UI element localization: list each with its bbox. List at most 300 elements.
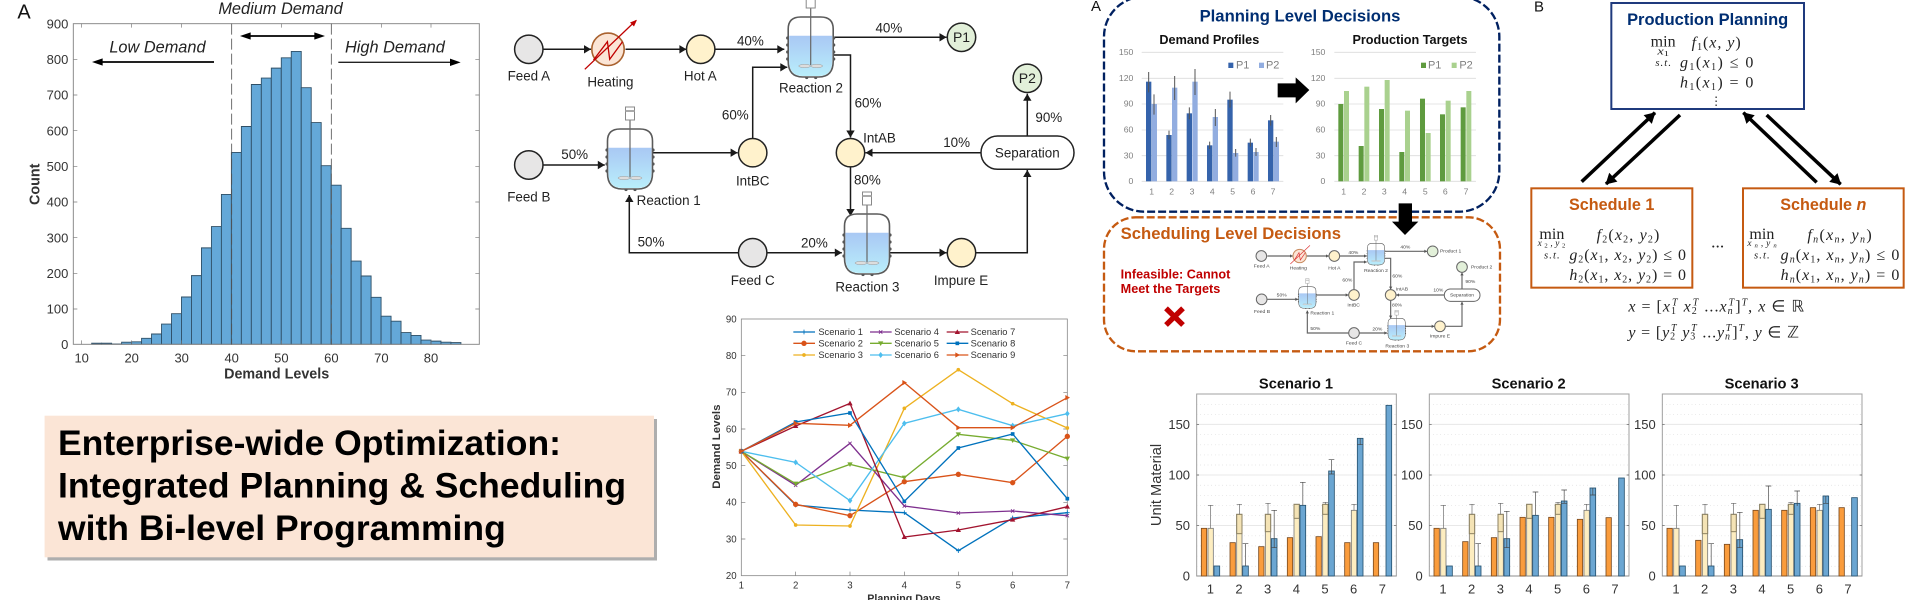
histogram axes: 40 [224,350,239,365]
chart axes: 6 [1010,580,1015,591]
chart axes [711,314,1070,600]
production planning box: x [1702,55,1710,72]
schedule n box: , [1841,267,1850,284]
variable definitions: T [1671,323,1678,334]
variable definitions: ... [1699,299,1718,316]
schedule 1 box: 2 [1646,254,1651,265]
infeasible note [1121,267,1231,296]
production planning box: f [1692,35,1699,52]
arrow: schedule n to planning [1743,113,1817,182]
chart axes: 2 [793,580,798,591]
schedule 1 box: min [1539,226,1564,243]
schedule 1 box: x [1613,247,1621,264]
process labels: Reaction 3 [835,280,899,295]
production planning box: x [1702,75,1710,92]
variable definitions: T [1742,297,1749,308]
histogram axes: Demand Levels [224,366,329,382]
demand range markers: Medium Demand [218,0,344,18]
production planning box: 1 [1697,42,1702,53]
chart: demand profiles: P2 [1266,59,1279,71]
variable definitions: T [1726,323,1733,334]
arrow: planning to schedule n [1767,115,1841,184]
production planning box: ( [1703,35,1708,52]
mini process diagram: 60% [1342,278,1353,284]
histogram axes: 30 [174,350,189,365]
schedule n box: , [1841,227,1850,244]
schedule n box: x [1825,247,1834,264]
demand range markers: High Demand [345,38,446,56]
schedule n box: n [1813,234,1818,245]
schedule n box: n [1835,274,1840,285]
schedule n box: n [1860,234,1865,245]
schedule 1 box: h [1569,267,1577,284]
bar chart: scenario 1 [1168,376,1396,596]
schedule n box: , [1816,267,1825,284]
schedule n box: n [1835,254,1840,265]
schedule 1 box: ( [1584,247,1590,264]
chart: demand profiles: 90 [1124,99,1134,109]
chart: demand profiles: 7 [1271,187,1276,197]
chart: production targets: 2 [1362,187,1367,197]
schedule n box: Schedule n [1780,196,1867,214]
chart: demand profiles: 0 [1129,176,1134,186]
schedule 1 box: g [1569,247,1577,264]
variable definitions: y ∈ ℤ [1755,324,1799,341]
chart axes: Demand Levels [711,405,723,489]
chart: demand profiles: 120 [1119,73,1134,83]
production planning box: 1 [1711,82,1716,93]
process labels: Impure E [934,273,988,288]
schedule n box: x [1825,267,1833,284]
chart: demand profiles: 150 [1119,47,1134,57]
process labels: 20% [801,236,828,251]
mini process diagram: 20% [1372,327,1383,333]
production planning box: Production Planning [1627,11,1788,29]
histogram axes: 400 [47,195,68,210]
mini process diagram: IntAB [1396,287,1409,293]
histogram axes [27,17,479,382]
mini process diagram: Separation [1450,293,1474,299]
histogram axes: 600 [47,123,68,138]
schedule 1 box: , [1604,267,1613,284]
chart axes: 70 [726,388,737,399]
process labels: IntAB [863,130,896,145]
variable definitions: 2 [1692,306,1697,317]
schedule 1 box: x [1589,267,1598,284]
chart: demand profiles: Demand Profiles [1159,33,1259,47]
process labels: 50% [638,235,664,250]
schedule 1 box: y [1638,227,1648,244]
mini process diagram: Heating [1290,266,1307,272]
schedule 1 box: 2 [1578,274,1583,285]
line chart legend: Scenario 9 [971,350,1015,360]
line chart legend: Scenario 5 [894,338,939,348]
chart: demand profiles: 4 [1210,187,1215,197]
bar chart: scenario 3 [1634,376,1862,596]
histogram axes: 0 [61,337,68,352]
title box: with Bi-level Programming [57,508,506,548]
histogram bars [92,51,461,344]
reactors [605,0,892,276]
scenario lines [741,370,1067,551]
chart: production targets: 7 [1464,187,1469,197]
panel: demand histogram [17,0,479,382]
chart: demand profiles: 60 [1124,125,1134,135]
schedule 1 box: 2 [1622,274,1627,285]
production planning box: x [1657,46,1662,57]
infeasible note: Infeasible: Cannot [1121,267,1231,281]
arrow: planning to targets [1278,77,1309,103]
schedule 1 box: y [1636,247,1646,264]
variable definitions: x [1718,299,1727,316]
schedule 1 box: 2 [1648,234,1653,245]
production planning box: ⋮ [1710,95,1722,107]
flow arrows [543,37,1027,253]
chart: production targets: 120 [1311,73,1326,83]
production planning box: ) = 0 [1717,75,1753,92]
mini process diagram: Reaction 1 [1310,310,1334,316]
planning dashed frame [1104,0,1499,212]
schedule n box: min [1749,226,1774,243]
chart axes: 30 [726,534,737,545]
schedule n box: ) = 0 [1865,267,1899,284]
schedule 1 box: ) ≤ 0 [1652,247,1686,264]
schedule n box: n [1773,242,1777,249]
mini process diagram: Reaction 3 [1385,344,1409,350]
schedule 1 box: x [1613,267,1621,284]
chart: production targets: 30 [1316,150,1326,160]
production planning box: ( [1696,75,1701,92]
schedule n box: g [1781,247,1789,264]
schedule n box: n [1754,242,1758,249]
chart axes: 40 [726,498,737,509]
chart: production targets: 0 [1321,176,1326,186]
schedule 1 box: 2 [1544,242,1548,249]
bar chart: scenario 1: Scenario 1 [1259,376,1333,392]
schedule 1 box: f [1597,227,1604,244]
icon: red cross [1166,308,1183,325]
panel B: bi-level formulation [1531,0,1904,343]
schedule n box: , [1841,247,1850,264]
panel letter A: A [17,1,31,23]
bar chart: scenario 2: Scenario 2 [1492,376,1566,392]
ellipsis between schedules: ... [1711,232,1724,251]
process labels: 60% [855,95,881,110]
mini process diagram: 40% [1400,245,1411,251]
mini process diagram: Impure E [1430,334,1451,340]
mini process diagram: Product 1 [1440,249,1462,255]
process labels: 40% [875,20,902,35]
schedule n box: y [1849,247,1859,264]
demand range markers: Low Demand [109,38,206,56]
schedule n box: ) [1866,227,1872,244]
chart: demand profiles: 30 [1124,150,1134,160]
arrow: schedule 1 to planning [1582,113,1655,182]
process labels: 80% [854,172,881,187]
histogram axes: 200 [47,266,68,281]
schedule n box: ( [1819,227,1825,244]
mini process diagram: 60% [1392,273,1403,279]
schedule 1 box: 2 [1622,254,1627,265]
mini process diagram: Hot A [1328,266,1341,272]
chart: demand profiles: 1 [1149,187,1154,197]
chart: production targets: 6 [1443,187,1448,197]
schedule n box: n [1790,254,1795,265]
chart: production targets: 90 [1316,99,1326,109]
variable definitions: ... [1698,324,1716,341]
histogram axes: 60 [324,350,339,365]
process labels: Feed C [731,273,775,288]
line chart legend: Scenario 7 [971,327,1015,337]
chart axes: 60 [726,424,737,435]
process labels: P1 [953,29,970,45]
mini process diagram: 90% [1465,279,1476,285]
schedule n box: y [1849,267,1859,284]
schedule 1 box: x [1614,227,1622,244]
mini process diagram: Feed B [1254,309,1271,315]
variable definitions: n [1725,332,1730,343]
process labels: Hot A [684,69,717,84]
panel: scheduling level decisions [1104,203,1500,351]
variable definitions: T [1738,323,1745,334]
schedule 1 box: , [1629,227,1638,244]
mini process diagram: Feed A [1254,263,1270,269]
schedule n box: x [1801,247,1809,264]
chart: production targets: 3 [1382,187,1387,197]
line chart legend: Scenario 8 [971,338,1015,348]
production planning box: 1 [1711,62,1716,73]
schedule n box: ( [1796,267,1801,284]
scheduling dashed frame [1104,217,1500,351]
process labels: 90% [1035,110,1062,125]
mini process diagram: 80% [1392,302,1403,308]
schedule 1 box: 2 [1646,274,1651,285]
mini process diagram: Feed C [1346,341,1363,347]
production planning box: 1 [1689,62,1694,73]
schedule 1 box: 1 [1599,254,1604,265]
line chart legend [793,327,1015,360]
schedule 1 box: , [1628,267,1637,284]
line chart legend: Scenario 2 [818,338,863,348]
chart: production targets [1311,33,1476,197]
process labels: 60% [722,107,749,122]
variable definitions: , [1745,324,1754,341]
variable definitions: T [1693,297,1700,308]
schedule n box: n [1790,274,1795,285]
process flow diagram [507,0,1074,295]
variable definitions: 3 [1690,332,1695,343]
process labels: Separation [995,146,1060,161]
schedule n box: 1 [1810,274,1815,285]
schedule n box: h [1781,267,1789,284]
schedule 1 box: 1 [1598,274,1603,285]
variable definitions: x = [x [1628,299,1670,316]
schedule n box: x [1825,227,1833,244]
schedule 1 box: 2 [1623,234,1628,245]
schedule n box: ( [1796,247,1801,264]
chart axes: 50 [726,461,737,472]
title box: Enterprise-wide Optimization: [58,423,561,463]
chart: demand profiles: P1 [1236,59,1249,71]
production planning box: 1 [1664,49,1669,58]
variable definitions: T [1672,297,1679,308]
line chart legend: Scenario 4 [894,327,939,337]
chart axes: 90 [726,314,737,325]
chart: production targets: 4 [1402,187,1407,197]
mini process diagram: 50% [1310,326,1321,332]
production planning box: g [1680,55,1688,72]
process labels: Feed B [507,189,550,204]
mini process diagram: 50% [1277,293,1287,299]
schedule 1 box: 2 [1578,254,1583,265]
histogram axes: 70 [374,350,389,365]
process labels: Feed A [508,69,550,84]
schedule 1 box: ) [1654,227,1659,244]
variable definitions: 1 [1671,306,1676,317]
variable definitions: y [1715,324,1725,341]
variable definitions: n [1728,306,1733,317]
scheduling heading: Scheduling Level Decisions [1121,224,1341,243]
histogram axes: 300 [47,230,68,245]
schedule n box: f [1807,227,1814,244]
histogram axes: 900 [47,17,68,32]
arrow: planning to schedule 1 [1606,115,1680,184]
production planning box [1611,3,1804,109]
histogram axes: 80 [424,350,438,365]
production planning box: h [1680,75,1688,92]
variable definitions: x [1683,299,1691,316]
process labels: IntBC [736,174,770,189]
schedule n box: s.t. [1754,250,1770,261]
histogram axes: Count [27,163,43,205]
production planning box: ) ≤ 0 [1718,55,1753,72]
variable definitions: 2 [1670,332,1675,343]
schedule 1 box: 2 [1562,242,1565,249]
mini process diagram: Reaction 2 [1364,268,1388,274]
histogram axes: 50 [274,350,289,365]
production planning box: s.t. [1655,58,1671,69]
chart: production targets: 1 [1341,187,1346,197]
chart axes: 4 [902,580,908,591]
chart: demand profiles [1119,33,1283,197]
chart axes: 5 [956,580,961,591]
histogram axes: 700 [47,88,68,103]
chart: demand profiles: 6 [1251,187,1256,197]
process labels [507,20,1062,295]
variable definitions: ] [1735,299,1741,316]
schedule n box: x [1747,239,1751,249]
schedule 1 box: , [1604,247,1613,264]
y-axis label: unit material: Unit Material [1149,444,1165,526]
chart axes: 3 [847,580,853,591]
chart axes: 20 [726,571,737,582]
infeasible note: Meet the Targets [1121,282,1220,296]
title box: Integrated Planning & Scheduling [58,465,626,505]
line chart: demand scenarios [711,314,1070,600]
schedule 1 box [1531,188,1692,288]
line chart legend: Scenario 6 [894,350,939,360]
panel: planning level decisions [1091,0,1499,212]
schedule 1 box: ) = 0 [1652,267,1686,284]
chart: production targets: Production Targets [1352,33,1468,47]
production planning box: x, y) [1709,35,1741,52]
schedule 1 box: 2 [1602,234,1607,245]
chart axes: 80 [726,351,737,362]
histogram axes: 100 [47,302,68,317]
schedule 1 box: ( [1584,267,1590,284]
variable definitions: y = [y [1628,324,1669,341]
mini process diagram: IntBC [1347,303,1360,309]
schedule n box: n [1835,234,1840,245]
production planning box: 1 [1689,82,1694,93]
chart: production targets: P1 [1428,59,1441,71]
process labels: 50% [561,147,588,162]
variable definitions: y [1680,324,1690,341]
mini process diagram: 40% [1348,250,1359,256]
chart: production targets: 60 [1316,125,1326,135]
schedule n box: n [1859,254,1864,265]
histogram axes: 800 [47,52,68,67]
schedule 1 box: x [1589,247,1598,264]
chart: demand profiles: 3 [1190,187,1195,197]
process labels: P2 [1019,70,1036,86]
process labels: 10% [943,135,970,150]
chart: production targets: P2 [1459,59,1473,71]
schedule n box: , [1816,247,1825,264]
schedule 1 box: x [1538,239,1542,249]
schedule 1 box: ,y [1550,239,1560,249]
schedule n box: ) ≤ 0 [1865,247,1899,264]
schedule n box: 1 [1810,254,1815,265]
schedule 1 box: s.t. [1544,250,1560,261]
arrow: planning down to scheduling [1392,203,1418,235]
schedule 1 box: , [1628,247,1637,264]
variable definitions: T [1729,297,1736,308]
heat exchanger icon [585,20,637,69]
line chart legend: Scenario 3 [818,350,863,360]
process labels: Reaction 2 [779,81,843,96]
chart: demand profiles: 5 [1230,187,1235,197]
schedule n box: y [1850,227,1860,244]
process labels: Reaction 1 [637,193,701,208]
histogram axes: 10 [74,350,89,365]
process labels: 40% [737,34,764,49]
title box [45,416,657,560]
chart: production targets: 5 [1423,187,1428,197]
variable definitions: , [1748,299,1757,316]
stream nodes [515,23,1074,267]
schedule n box: ,y [1761,239,1771,249]
schedule 1 box: Schedule 1 [1569,196,1654,214]
variable definitions [1626,297,1804,343]
schedule 1 box: y [1636,267,1646,284]
variable definitions: x ∈ ℝ [1758,299,1804,316]
variable definitions: T [1691,323,1698,334]
process labels: Heating [587,75,633,90]
histogram axes: 500 [47,159,68,174]
schedule n box: x [1801,267,1809,284]
histogram axes: 20 [124,350,139,365]
schedule n box [1743,188,1904,288]
line chart legend: Scenario 1 [818,327,863,337]
variable definitions: ] [1732,324,1738,341]
mini process diagram [1254,235,1493,350]
schedule 1 box: ( [1608,227,1614,244]
mini process diagram: 10% [1433,288,1444,294]
chart axes: 7 [1065,580,1070,591]
production planning box: min [1651,34,1676,51]
bar chart: scenario 3: Scenario 3 [1725,376,1799,392]
